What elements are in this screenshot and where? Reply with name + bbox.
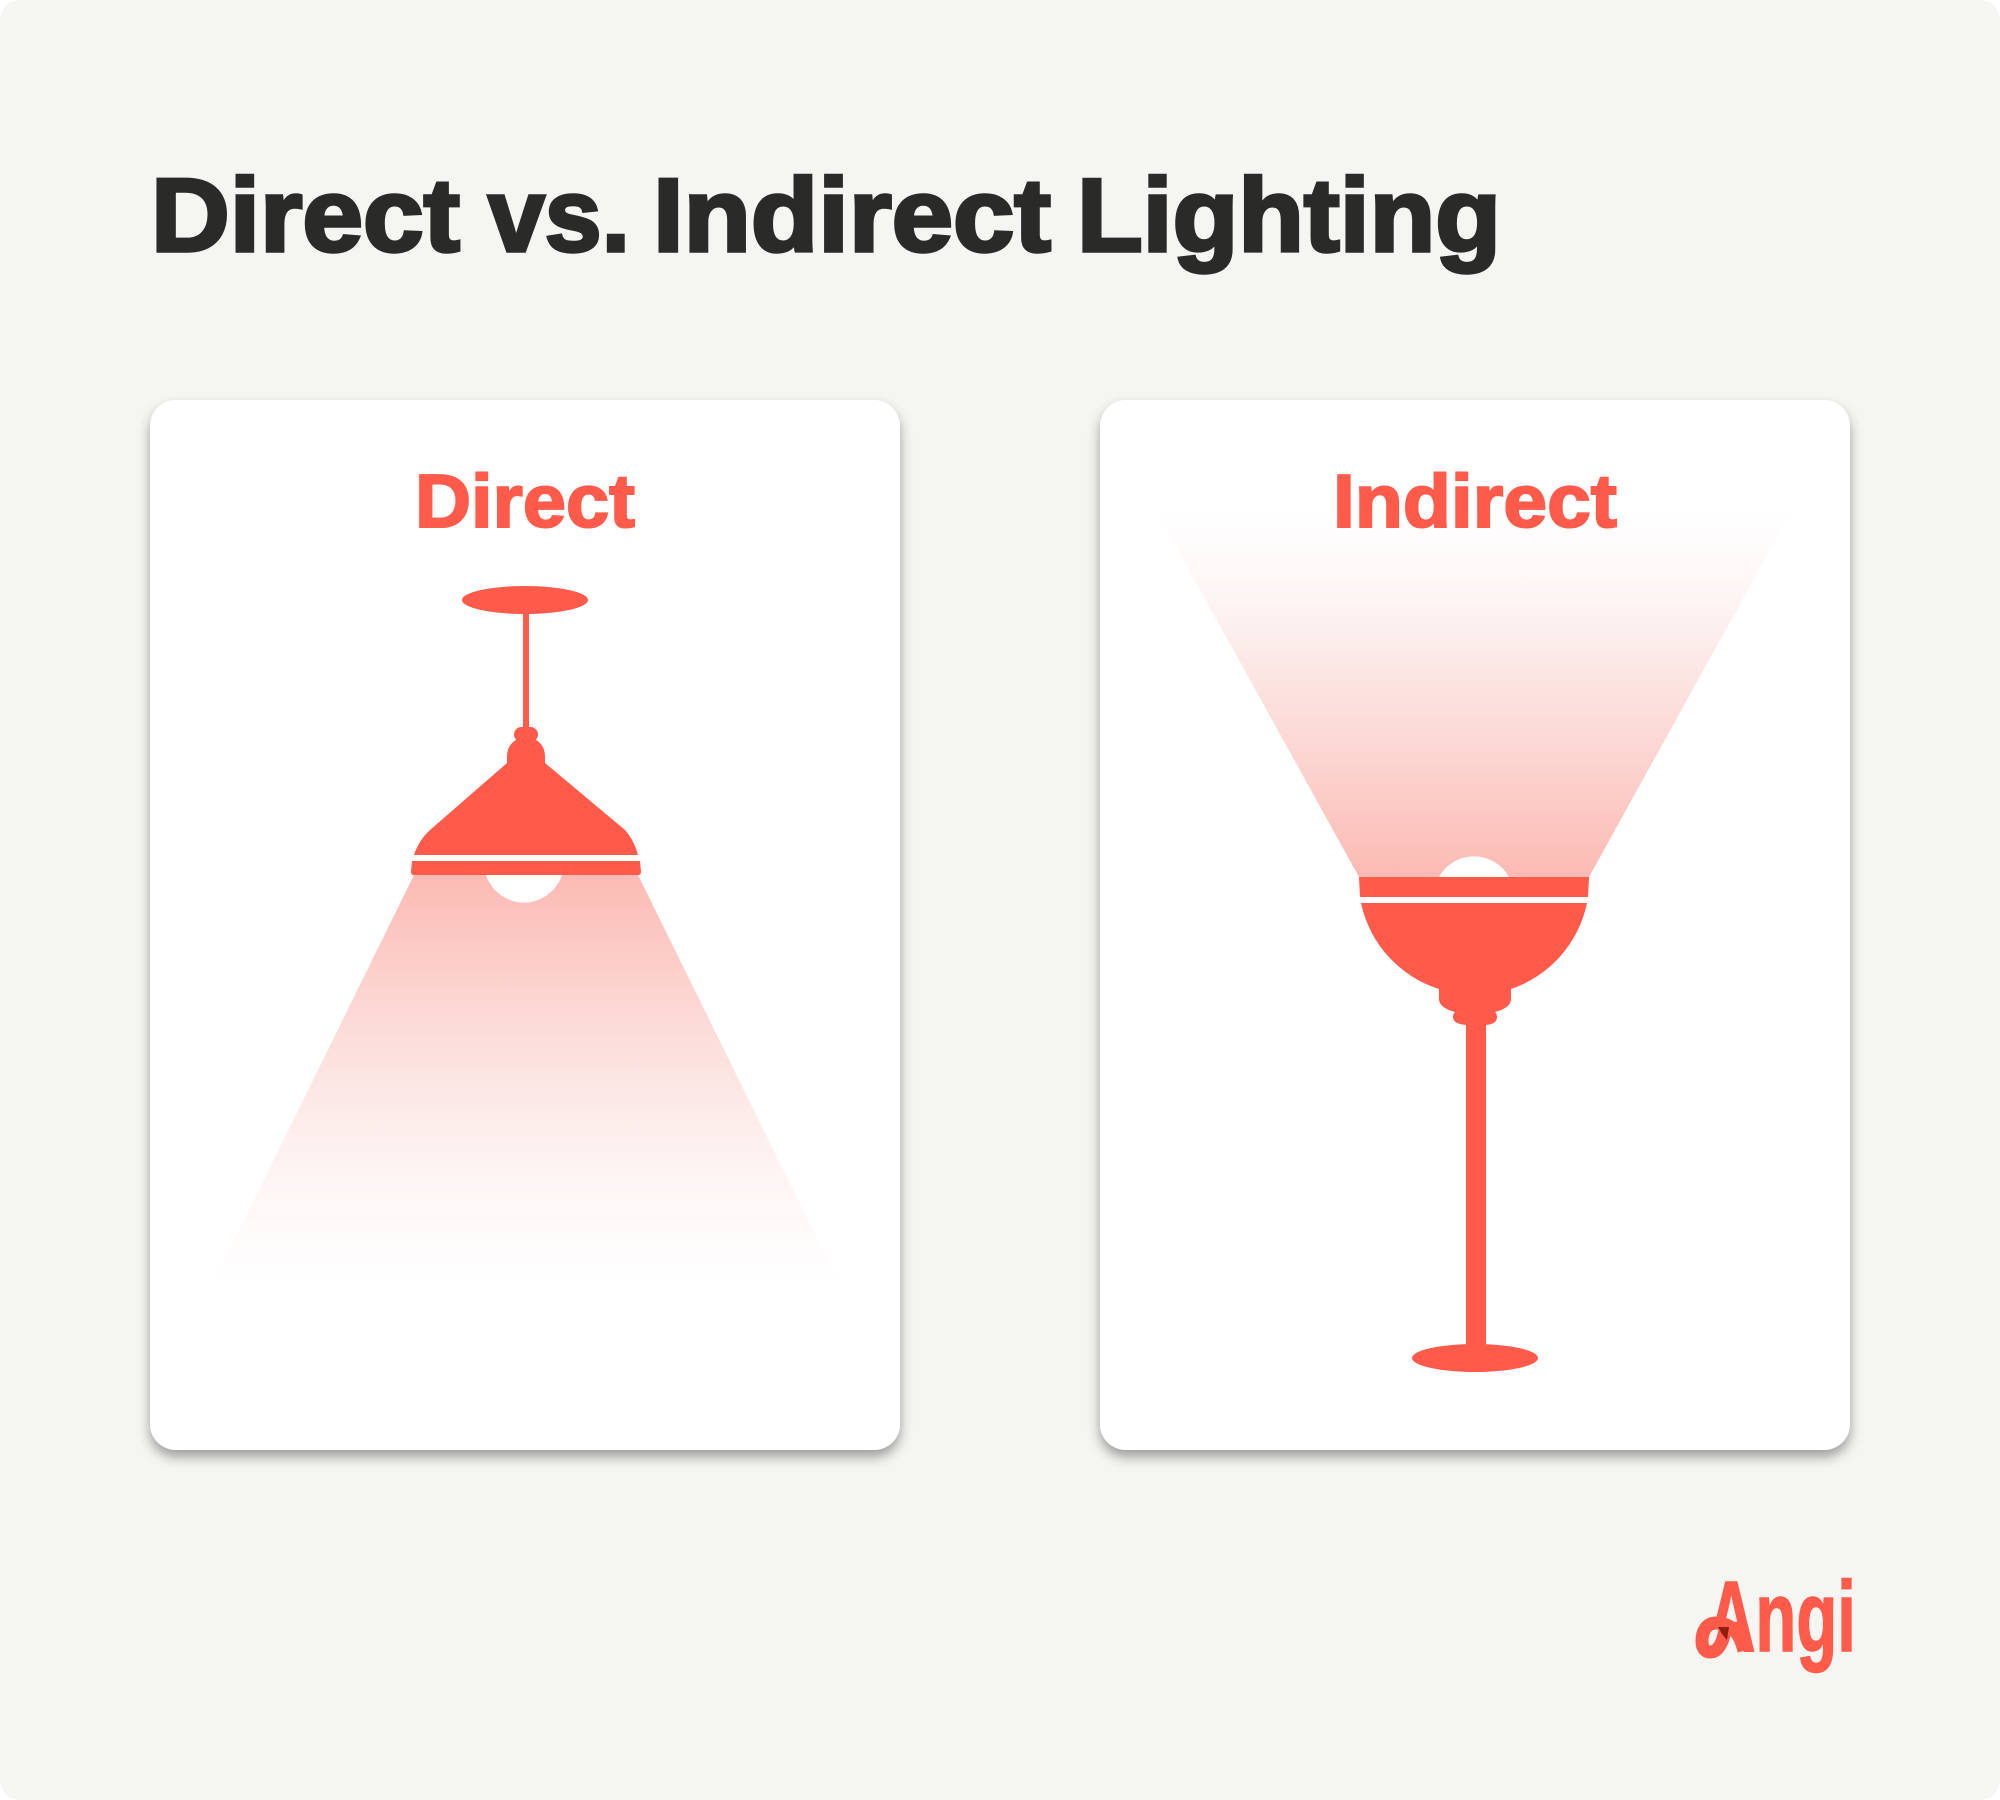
- logo: Angi: [1700, 1562, 1856, 1673]
- icon: bulb: [486, 875, 562, 903]
- icon: floor lamp: [1359, 877, 1589, 1372]
- icon: bulb: [1439, 856, 1509, 877]
- title: vs.: [488, 158, 630, 274]
- panel: indirect: [1100, 400, 1850, 1450]
- heading: direct: Direct: [415, 459, 635, 543]
- title: Direct: [151, 158, 460, 274]
- logo: Angi: A: [1707, 1562, 1756, 1673]
- title: [151, 158, 1501, 274]
- title: Indirect: [653, 158, 1051, 274]
- card: indirect: [1100, 400, 1850, 1450]
- card: direct: [150, 400, 900, 1450]
- icon: pendant lamp: [411, 586, 641, 875]
- panel: direct: [150, 400, 900, 1450]
- heading: indirect: Indirect: [1333, 459, 1617, 543]
- light beam: upward: [1157, 512, 1791, 877]
- light beam: downward: [212, 875, 840, 1285]
- logo: Angi: ngi: [1755, 1562, 1856, 1673]
- title: Lighting: [1077, 158, 1501, 274]
